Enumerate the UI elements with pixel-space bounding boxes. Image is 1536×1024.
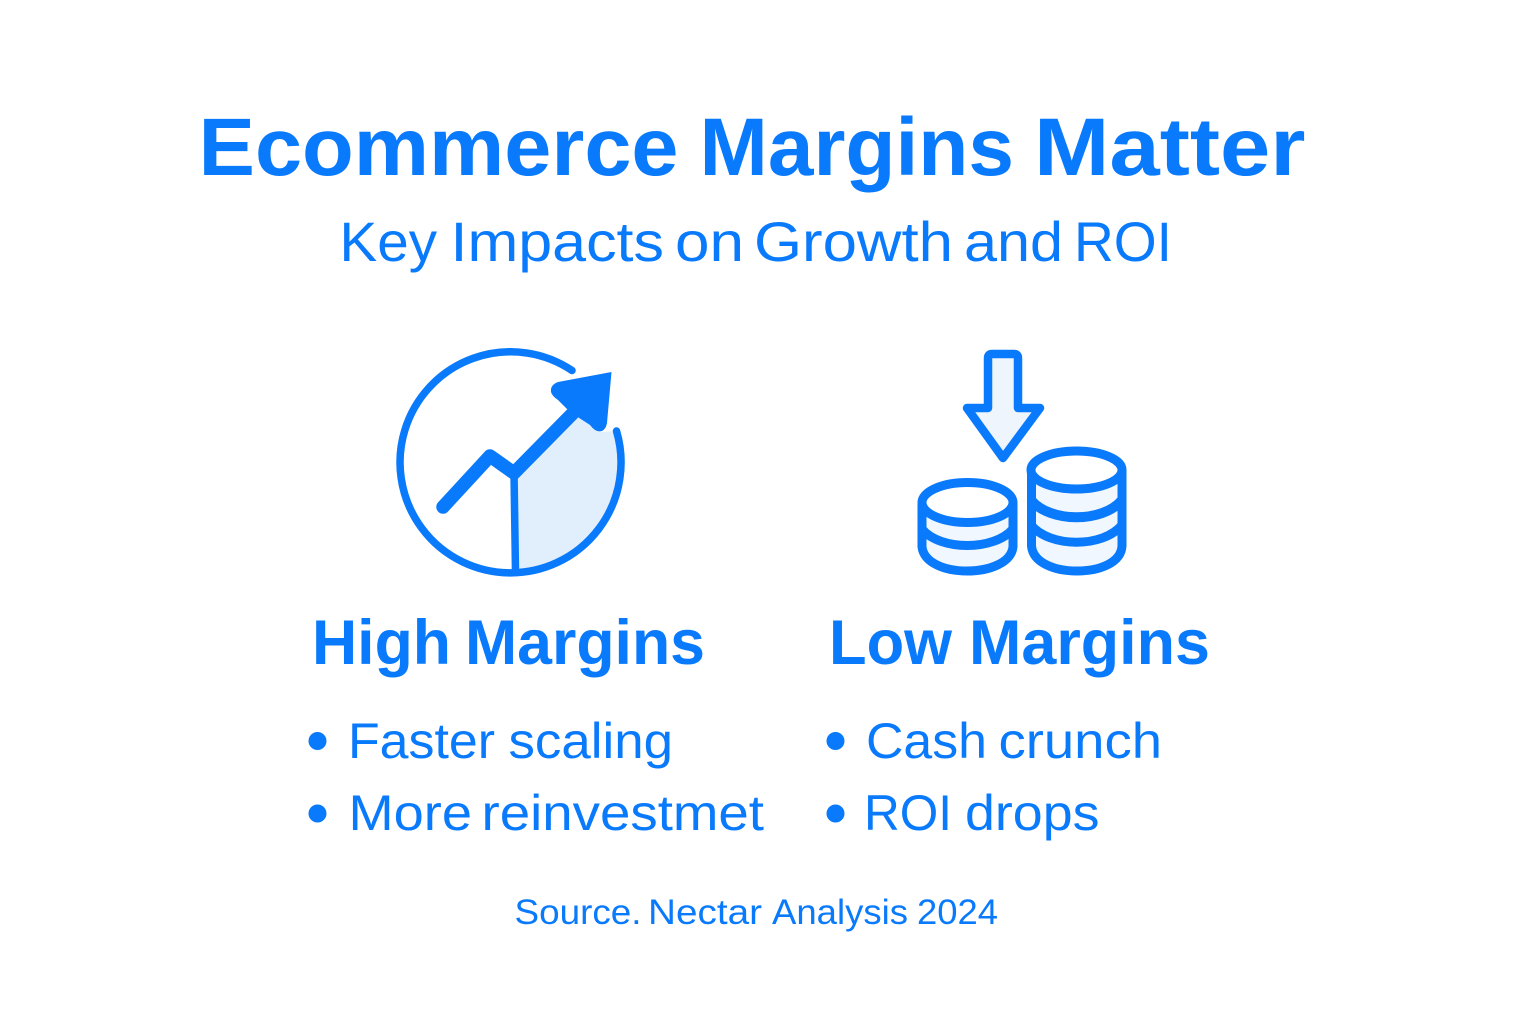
list: high margins: reinvestmet [482,785,764,841]
list: high margins: scaling [508,713,673,769]
source note [514,893,998,932]
down arrow [967,354,1040,458]
subtitle: Key [340,210,437,273]
icon: rising arrow in circle [400,352,621,573]
icon: down arrow over coin stacks [922,354,1122,571]
list: low margins: ROI [864,785,952,841]
source note: Nectar [648,893,762,932]
heading: high margins [312,608,705,678]
list: low margins [826,713,1162,841]
source note: 2024 [917,893,998,932]
title: Ecommerce [198,102,678,193]
list: high margins: Faster [348,713,495,769]
list: low margins: crunch [998,713,1162,769]
heading: low margins: Margins [969,608,1210,678]
title: Matter [1034,102,1306,193]
source note: Analysis [772,893,908,932]
heading: high margins: Margins [465,608,705,678]
left coin stack [922,482,1013,571]
list: high margins [308,713,764,841]
title: Margins [700,102,1014,193]
heading: low margins: Low [829,608,953,678]
subtitle: on [675,210,744,273]
list: low margins: Cash [866,713,987,769]
list: high margins: More [348,785,472,841]
source note: Source. [514,893,642,932]
subtitle: Impacts [450,210,664,273]
heading: low margins [829,608,1210,678]
subtitle [340,210,1172,273]
title [198,102,1306,193]
subtitle: ROI [1074,210,1172,273]
heading: high margins: High [312,608,451,678]
list: low margins: drops [965,785,1100,841]
subtitle: and [964,210,1063,273]
right coin stack [1031,451,1122,571]
subtitle: Growth [754,210,953,273]
